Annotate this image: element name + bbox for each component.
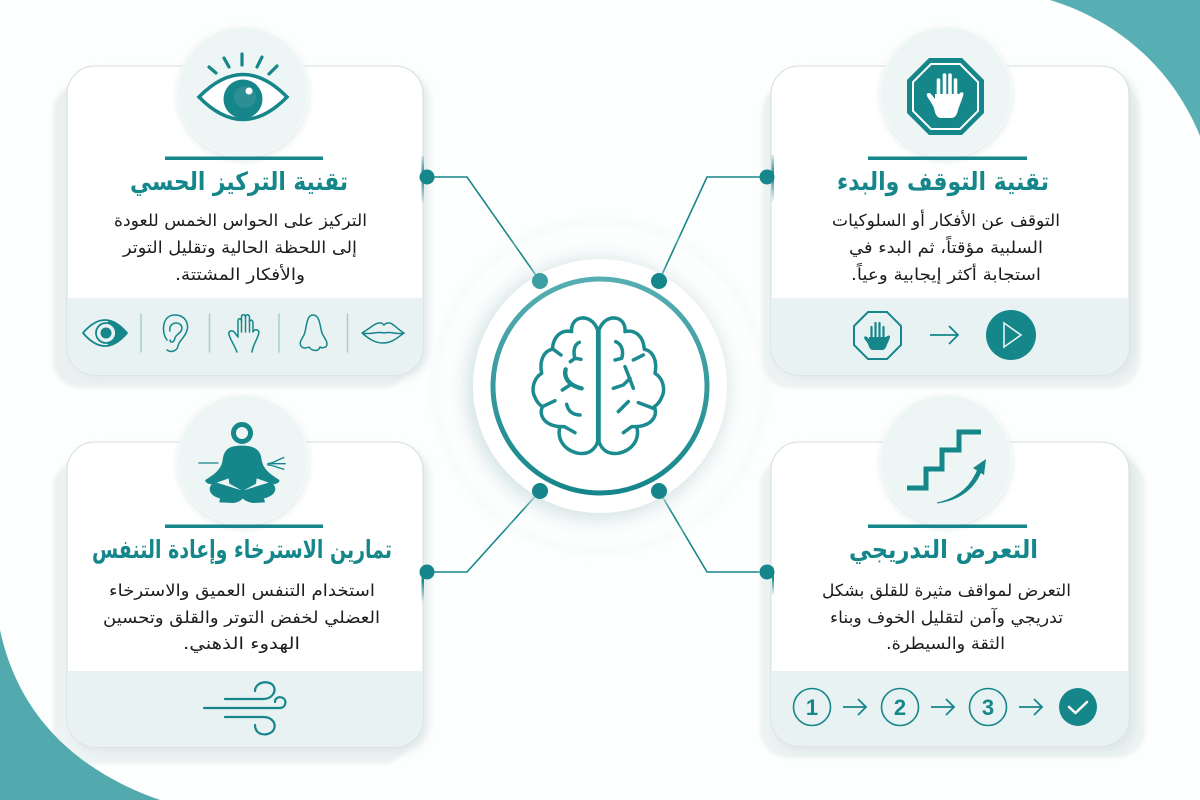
icon badge: eye [178, 27, 308, 160]
five senses icons [83, 314, 404, 352]
description: السلبية مؤقتاً، ثم البدء في [849, 235, 1043, 258]
panel: stop and start [762, 27, 1140, 388]
description: الثقة والسيطرة. [886, 634, 1005, 654]
stop to start sequence [854, 310, 1036, 360]
numbered steps: 2 [894, 695, 906, 720]
panel: sensory focus [53, 27, 428, 388]
corner shape: top right [1050, 0, 1200, 136]
description: الهدوء الذهني. [183, 634, 300, 654]
icon badge: stairs [881, 395, 1011, 528]
description: العضلي لخفض التوتر والقلق وتحسين [103, 608, 380, 628]
title rule [165, 156, 323, 160]
description [822, 581, 1071, 654]
description: التوقف عن الأفكار أو السلوكيات [832, 209, 1060, 231]
description: إلى اللحظة الحالية وتقليل التوتر [122, 238, 357, 258]
description: استخدام التنفس العميق والاسترخاء [109, 581, 375, 601]
title rule [165, 524, 323, 528]
numbered steps [794, 688, 1097, 726]
description: التعرض لمواقف مثيرة للقلق بشكل [822, 581, 1071, 601]
icon badge: meditation [178, 395, 308, 528]
numbered steps: 3 [982, 695, 994, 720]
description: والأفكار المشتتة. [175, 264, 305, 285]
heading: تمارين الاسترخاء وإعادة التنفس [92, 535, 392, 565]
description [114, 211, 367, 285]
description [832, 209, 1060, 285]
icon: brain [533, 318, 664, 454]
corner shape: bottom left [0, 630, 160, 800]
description: استجابة أكثر إيجابية وعياً. [851, 262, 1041, 285]
panel: gradual exposure [760, 395, 1145, 758]
heading: تقنية التركيز الحسي [130, 167, 348, 197]
description [103, 581, 380, 654]
description: التركيز على الحواس الخمس للعودة [114, 211, 367, 231]
title rule [868, 524, 1027, 528]
title rule [868, 156, 1027, 160]
icon badge: stop hand [881, 27, 1011, 160]
heading: التعرض التدريجي [849, 535, 1038, 565]
numbered steps: 1 [806, 695, 818, 720]
connector dots [420, 170, 774, 580]
icon: wind [204, 682, 285, 734]
heading: تقنية التوقف والبدء [837, 167, 1049, 197]
panel: breathing and relaxation [0, 395, 428, 800]
connector lines [427, 177, 767, 572]
description: تدريجي وآمن لتقليل الخوف وبناء [830, 608, 1063, 628]
central brain medallion [435, 221, 765, 551]
